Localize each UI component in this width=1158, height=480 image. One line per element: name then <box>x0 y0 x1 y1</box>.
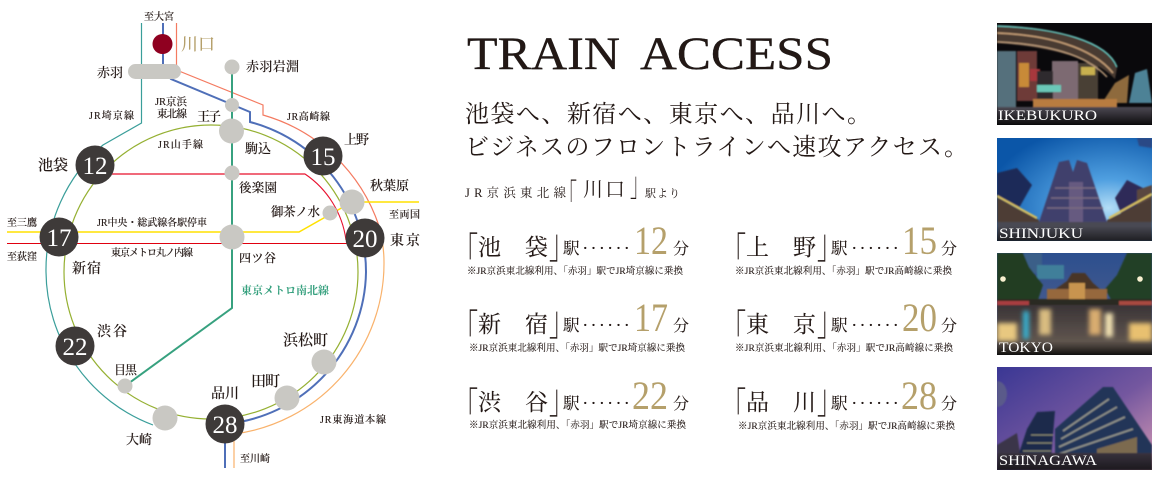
row: Shinjuku: ...... <box>583 310 629 330</box>
photo: Tokyo <box>997 253 1152 356</box>
headline <box>465 101 968 161</box>
minutes: Ueno: 15 <box>310 144 336 171</box>
minutes: Shinjuku: 17 <box>46 225 72 252</box>
line: Marunouchi arc <box>112 174 346 240</box>
headline line 2: ビジネスのフロントラインへ速攻アクセス。 <box>465 134 968 161</box>
row: Tokyo <box>722 295 957 354</box>
line: JR Takasaki <box>176 23 379 226</box>
station: Ueno <box>304 136 342 176</box>
station: Ochanomizu <box>322 206 338 220</box>
label: SHINJUKU: SHINJUKU <box>999 226 1083 242</box>
row: Shinagawa: 品 <box>746 390 769 415</box>
station: Komagome <box>219 118 244 144</box>
row: Ueno: 野 <box>793 235 816 260</box>
grey stations <box>118 60 364 430</box>
minutes: Ikebukuro: 12 <box>82 153 108 180</box>
line: Marunouchi <box>7 242 365 244</box>
label: 至三鷹 <box>7 216 37 229</box>
line: Marunouchi pink section <box>112 173 305 175</box>
label: JR中央・総武線各駅停車 <box>97 216 207 229</box>
close bracket: 」 <box>630 166 648 204</box>
station minutes <box>46 144 378 439</box>
row: Shinjuku: 」 <box>549 300 573 345</box>
row: Tokyo: 」 <box>817 300 841 345</box>
label: 王子 <box>197 109 221 124</box>
label: JR東海道本線 <box>320 413 386 426</box>
photo: Ikebukuro <box>997 23 1152 125</box>
row: Tokyo: ※JR京浜東北線利用、「赤羽」駅でJR高崎線に乗換 <box>735 342 953 354</box>
line: JR Saikyo <box>46 23 153 425</box>
row: Ikebukuro: 」 <box>549 223 573 268</box>
row: Shibuya: 分 <box>673 395 689 413</box>
row: Tokyo: 「 <box>722 309 746 354</box>
major stations <box>40 136 384 444</box>
map labels <box>7 10 420 465</box>
row: Ueno: 「 <box>722 232 746 277</box>
row: Ueno: 駅 <box>830 239 848 258</box>
row: Shinagawa: 28 <box>901 373 937 418</box>
title <box>467 28 833 80</box>
row: Tokyo: 東 <box>746 312 769 337</box>
row: Shinjuku: ※JR京浜東北線利用、「赤羽」駅でJR埼京線に乗換 <box>469 342 685 354</box>
label: 東京 <box>390 232 420 249</box>
label: 至大宮 <box>144 10 174 23</box>
row: Ikebukuro: 袋 <box>525 235 548 260</box>
label: JR山手線 <box>158 138 203 151</box>
times: left column <box>454 218 689 432</box>
title word 2: ACCESS <box>640 28 833 80</box>
station: Shinjuku <box>40 218 78 256</box>
route map <box>7 10 420 468</box>
row: Shinagawa: 」 <box>817 378 841 423</box>
row: Ikebukuro: 12 <box>634 218 668 263</box>
line: JR Yamanote <box>64 125 358 419</box>
row: Shinagawa: 川 <box>793 390 816 415</box>
station: Tokyo <box>346 218 384 258</box>
row: Shinagawa <box>722 373 957 432</box>
row: Ueno: 15 <box>902 218 937 263</box>
row: Ikebukuro: 池 <box>478 235 501 260</box>
row: Shibuya: 22 <box>632 373 668 418</box>
times: right column <box>722 218 957 432</box>
label: 後楽園 <box>239 180 277 195</box>
label: 秋葉原 <box>370 178 409 193</box>
row: Ueno: ※JR京浜東北線利用、「赤羽」駅でJR高崎線に乗換 <box>735 265 952 277</box>
title word 1: TRAIN <box>467 28 620 80</box>
label: JR京浜 <box>155 95 188 108</box>
station: Akabane <box>128 64 181 79</box>
row: Ikebukuro: 分 <box>673 240 689 258</box>
row: Shibuya: 「 <box>454 387 478 432</box>
label: IKEBUKURO: IKEBUKURO <box>998 108 1097 124</box>
row: Shinagawa: 「 <box>722 387 746 432</box>
row: Shinagawa: ...... <box>852 388 898 408</box>
station: Yotsuya <box>220 224 244 250</box>
row: Tokyo: 京 <box>793 312 816 337</box>
label: JR埼京線 <box>89 109 134 122</box>
row: Ikebukuro: 駅 <box>562 239 580 258</box>
row: Ikebukuro: 「 <box>454 232 478 277</box>
row: Shinjuku: 17 <box>634 295 668 340</box>
row: Ikebukuro: ※JR京浜東北線利用、「赤羽」駅でJR埼京線に乗換 <box>467 265 683 277</box>
station: Shinagawa <box>206 404 244 444</box>
station: Hamamatsucho <box>312 350 336 374</box>
row: Shibuya: 駅 <box>562 394 580 413</box>
label: 東京メトロ丸ノ内線 <box>111 246 193 259</box>
station: Kawaguchi <box>152 34 172 54</box>
row: Shibuya <box>454 373 689 432</box>
row: Tokyo: 20 <box>902 295 937 340</box>
minutes: Tokyo: 20 <box>352 226 378 253</box>
row: Shibuya: 渋 <box>478 390 502 415</box>
row: Ueno <box>722 218 957 277</box>
label: Kawaguchi: 川口 <box>181 35 215 54</box>
headline line 1: 池袋へ、新宿へ、東京へ、品川へ。 <box>465 101 871 128</box>
origin suffix: 駅より <box>644 187 680 200</box>
station: Oji <box>225 98 239 112</box>
row: Ikebukuro: ...... <box>583 233 629 253</box>
row: Shinjuku <box>454 295 689 354</box>
label: 上野 <box>344 132 369 147</box>
minutes: Shinagawa: 28 <box>212 412 238 439</box>
open bracket: 「 <box>559 178 577 216</box>
photo: Shinagawa <box>997 367 1152 470</box>
row: Ueno: 上 <box>746 235 769 260</box>
row: Shibuya: ※JR京浜東北線利用、「赤羽」駅でJR埼京線に乗換 <box>469 419 686 431</box>
origin line name: JR京浜東北線 <box>465 185 566 200</box>
station: Akihabara <box>340 190 364 214</box>
row: Tokyo: 分 <box>941 317 957 335</box>
label: 赤羽 <box>97 65 123 80</box>
station: Akabaneiwabuchi <box>224 60 240 74</box>
row: Ueno: ...... <box>852 233 898 253</box>
station: Osaki <box>152 406 178 430</box>
row: Shinjuku: 宿 <box>525 312 548 337</box>
row: Shinagawa: 分 <box>941 395 957 413</box>
label: SHINAGAWA: SHINAGAWA <box>999 453 1097 469</box>
row: Shinjuku: 「 <box>454 309 478 354</box>
line: JR Chuo-Sobu <box>7 202 419 232</box>
line: JR Tokaido <box>234 226 384 468</box>
label: 品川 <box>211 386 239 402</box>
photo: Shinjuku <box>997 138 1152 242</box>
row: Shibuya: ...... <box>583 388 629 408</box>
label: TOKYO: TOKYO <box>999 340 1053 356</box>
row: Shibuya: 」 <box>549 378 573 423</box>
line: JR Keihin-Tohoku <box>163 23 366 468</box>
label: 至荻窪 <box>7 250 37 263</box>
station: Meguro <box>118 378 132 394</box>
label: 至両国 <box>389 209 420 221</box>
station: Shibuya <box>56 326 94 366</box>
row: Shibuya: 谷 <box>525 390 548 415</box>
row: Shinjuku: 新 <box>478 312 501 337</box>
label: 駒込 <box>244 141 271 156</box>
label: 目黒 <box>114 363 138 377</box>
line: Namboku <box>125 70 232 386</box>
label: 浜松町 <box>283 332 328 349</box>
label: 大崎 <box>126 432 152 447</box>
label: 赤羽岩淵 <box>246 59 299 74</box>
label: 四ツ谷 <box>239 251 276 265</box>
label: Namboku line: 東京メトロ南北線 <box>241 283 329 297</box>
label: 渋谷 <box>97 324 127 340</box>
label: 東北線 <box>157 107 188 120</box>
label: 御茶ノ水 <box>271 204 320 219</box>
label: JR高崎線 <box>287 110 330 123</box>
row: Ueno: 分 <box>941 240 957 258</box>
minutes: Shibuya: 22 <box>62 334 88 361</box>
label: 至川崎 <box>240 452 270 465</box>
origin station: 川口 <box>583 179 625 201</box>
row: Shinagawa: ※JR京浜東北線利用、「赤羽」駅でJR高崎線に乗換 <box>738 420 955 432</box>
station: Korakuen <box>224 166 240 180</box>
station: Ikebukuro <box>76 146 114 184</box>
row: Tokyo: 駅 <box>830 316 848 335</box>
row: Tokyo: ...... <box>852 310 898 330</box>
origin line <box>465 166 680 216</box>
row: Shinjuku: 分 <box>673 317 689 335</box>
label: 田町 <box>251 373 280 390</box>
row: Shinjuku: 駅 <box>562 316 580 335</box>
label: 新宿 <box>72 260 101 277</box>
station: Tamachi <box>274 386 300 410</box>
row: Ikebukuro <box>454 218 689 277</box>
row: Shinagawa: 駅 <box>830 394 848 413</box>
row: Ueno: 」 <box>817 223 841 268</box>
label: 池袋 <box>38 156 68 174</box>
